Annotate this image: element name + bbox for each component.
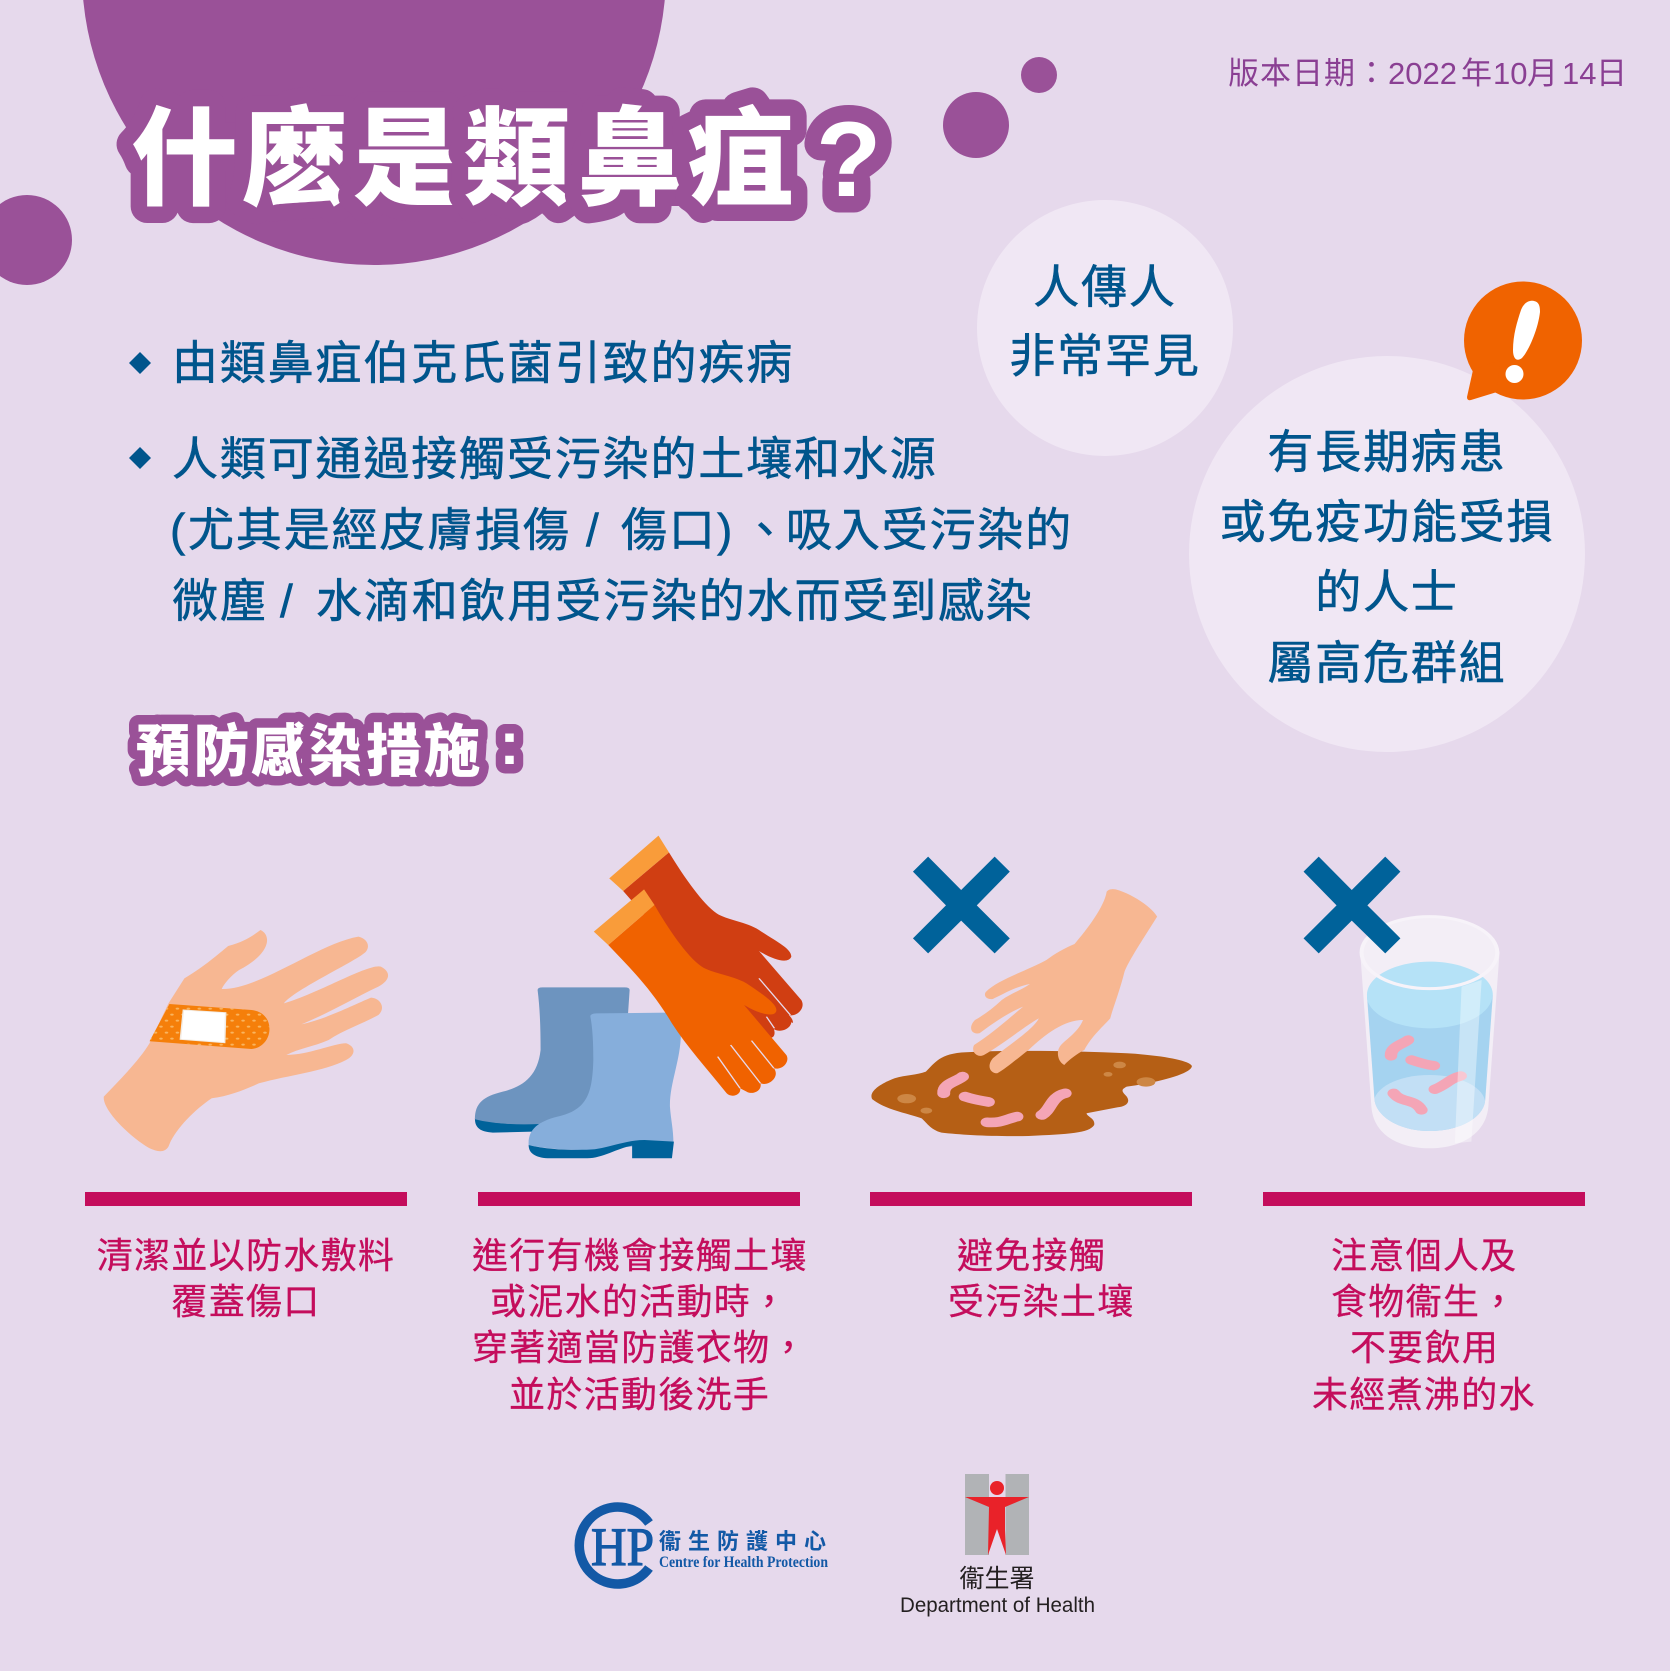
bullet 2: ( — [170, 504, 187, 556]
version date: 年 — [1461, 56, 1492, 91]
bullet 2: ) — [717, 504, 734, 556]
bullet 2: 微塵 — [172, 575, 268, 627]
column 4: bar and caption: 未經煮沸的水 — [1312, 1374, 1536, 1415]
germs in soil — [944, 1077, 1065, 1122]
column 3: bar and caption: 受污染土壤 — [948, 1281, 1135, 1322]
logo: Department of Health: 衞生署 — [959, 1565, 1035, 1593]
illustration: contaminated water glass — [1304, 857, 1500, 1148]
icon: exclamation speech bubble — [1464, 282, 1582, 400]
column 2: bar and caption: 進行有機會接觸土壤 — [472, 1235, 808, 1276]
bullet 2: / — [586, 504, 601, 556]
bubble: high risk group: 或免疫功能受損 — [1220, 496, 1554, 548]
logo: Department of Health: Department of Health — [900, 1594, 1095, 1617]
bullet 2: 尤其是經皮膚損傷 — [188, 504, 571, 556]
column 2: bar and caption — [472, 1192, 808, 1415]
illustration: boots and gloves — [475, 836, 803, 1158]
mud puddle — [871, 1051, 1192, 1136]
version date: 2022 — [1388, 56, 1457, 91]
section heading: : — [500, 710, 519, 777]
logo: Centre for Health Protection: 衞生防護中心 — [659, 1529, 833, 1554]
column 3: bar and caption: 避免接觸 — [957, 1235, 1106, 1276]
column 1: bar and caption — [85, 1192, 407, 1322]
cross mark — [913, 857, 1010, 953]
logo: Centre for Health Protection: HP — [591, 1517, 654, 1577]
column 2: bar and caption: 或泥水的活動時， — [490, 1281, 788, 1322]
bubble: high risk group: 的人士 — [1315, 566, 1459, 618]
bullet 2: 傷口 — [621, 504, 717, 556]
bullet 2: 人類可通過接觸受污染的土壤和水源 — [172, 433, 938, 485]
bandage — [150, 1004, 269, 1049]
cross mark — [1304, 857, 1400, 953]
bubble: person to person rare — [977, 200, 1233, 456]
bullet 2: 吸入受污染的 — [786, 504, 1073, 556]
version date: 10 — [1493, 56, 1527, 91]
bullet 2: 水滴和飲用受污染的水而受到感染 — [316, 575, 1034, 627]
bubble: person to person rare: 人傳人 — [1033, 261, 1177, 313]
column 1: bar and caption: 覆蓋傷口 — [171, 1281, 321, 1322]
column 4: bar and caption: 注意個人及 — [1331, 1235, 1518, 1276]
bubble: high risk group — [1189, 356, 1585, 752]
version date: 版本日期： — [1228, 56, 1388, 91]
title: 什麽是類鼻疽? — [131, 99, 881, 219]
logo: Department of Health — [900, 1474, 1095, 1617]
illustration: no contact with soil — [871, 857, 1192, 1136]
logo: Centre for Health Protection — [579, 1507, 833, 1584]
illustration: bandaged hand — [104, 930, 388, 1151]
version date: 14 — [1562, 56, 1596, 91]
bullet 2: / — [280, 575, 295, 627]
version date: 月 — [1527, 56, 1558, 91]
bubble: high risk group: 屬高危群組 — [1267, 637, 1507, 689]
column 1: bar and caption: 清潔並以防水敷料 — [97, 1235, 395, 1276]
column 2: bar and caption: 穿著適當防護衣物， — [472, 1327, 808, 1368]
column 2: bar and caption: 並於活動後洗手 — [509, 1374, 770, 1415]
logo: Centre for Health Protection: Centre for Health Protection — [659, 1554, 828, 1571]
column 4: bar and caption: 食物衞生， — [1331, 1281, 1518, 1322]
bullet list — [129, 337, 1073, 627]
version date: 日 — [1596, 56, 1627, 91]
column 4: bar and caption: 不要飲用 — [1350, 1327, 1499, 1368]
column 4: bar and caption — [1263, 1192, 1585, 1415]
bullet 2: 、 — [742, 504, 790, 556]
column 3: bar and caption — [870, 1192, 1192, 1322]
hand — [971, 889, 1157, 1073]
bullet 2 — [129, 433, 1073, 627]
bubble: person to person rare: 非常罕見 — [1009, 330, 1201, 382]
bullet 1: 由類鼻疽伯克氏菌引致的疾病 — [172, 337, 794, 389]
section heading: 預防感染措施 — [136, 720, 480, 784]
decorative purple circles — [0, 0, 1057, 285]
germs in water — [1391, 1040, 1461, 1110]
bubble: high risk group: 有長期病患 — [1267, 426, 1507, 478]
